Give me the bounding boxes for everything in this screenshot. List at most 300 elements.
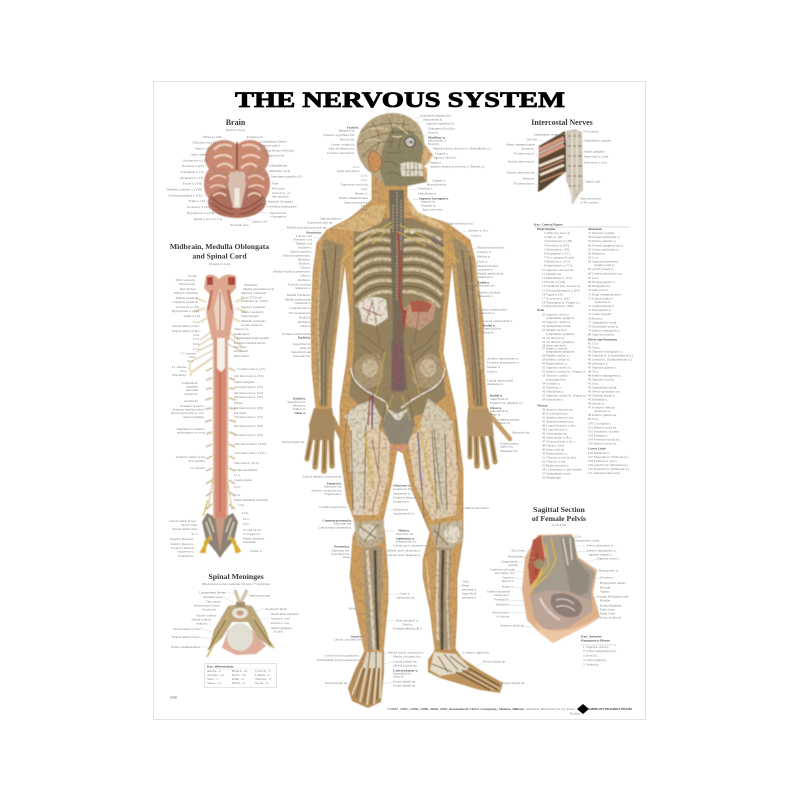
labels: pelvis right: Uterine (Fallopian) tube xyxy=(597,594,629,598)
labels: intercostal right: Intercostal n. (cut) xyxy=(584,154,608,158)
labels: thigh and knee: Anterior cutaneous brs. xyxy=(311,488,342,492)
labels: left arm: cutaneous n. xyxy=(295,301,311,305)
key column 1: sympathetic ganglion xyxy=(546,316,575,320)
labels: thigh and knee: Lateral femoral cutaneous nn. xyxy=(303,474,342,478)
labels: head and neck right: Nasal n. xyxy=(428,130,439,134)
labels: brain right: Mamillary body xyxy=(269,169,291,173)
labels: thigh and knee: Common peroneal n. xyxy=(462,506,490,510)
labels: left arm: muscular brs. xyxy=(293,354,311,358)
labels: lower leg and foot: peroneal n. xyxy=(462,588,477,592)
labels: lower leg and foot: Lateral plantar n. xyxy=(393,668,418,672)
labels: head and neck left: Supraclavicular n. xyxy=(344,200,368,204)
labels: left arm: Suprascapular n. xyxy=(290,250,312,254)
labels: pelvis right: Pubic bone xyxy=(600,608,615,612)
labels: spinal cord right: Coccygeal n. xyxy=(243,532,260,536)
labels: left arm: Ulnar n. xyxy=(300,274,311,278)
labels: right arm: Proper palmar xyxy=(500,442,520,446)
labels: pelvis left: Dorsal nerve xyxy=(492,610,510,614)
labels: spinal cord right: 10th intercostal n. (T10) xyxy=(234,442,266,446)
labels: thigh and knee: Tibial n. xyxy=(398,528,410,532)
labels: head and neck right: Lingual n. xyxy=(432,178,446,182)
labels: thigh and knee: Posterior femoral xyxy=(393,496,416,500)
labels: right arm: Lateral antebrachial n. xyxy=(483,319,513,323)
labels: left arm: Posterior brachial xyxy=(288,282,311,286)
labels: left arm: Radial n. xyxy=(299,262,311,266)
key: abbreviations: Cervical - C xyxy=(255,669,272,673)
labels: meninges right: Spinous process xyxy=(249,594,271,598)
labels: intercostal right: Spinal ganglion xyxy=(584,150,605,154)
labels: right arm: Musculocutaneous n. xyxy=(477,246,505,250)
illustration: brain xyxy=(204,140,270,218)
labels: head and neck left: C1 n. xyxy=(353,165,360,169)
labels: right arm: Common palmar xyxy=(497,418,520,422)
labels: right arm: Radial n. xyxy=(477,280,490,284)
labels: lower leg and foot: Lateral calcaneal brs. xyxy=(334,638,362,642)
labels: spinal cord right: Arachnoid xyxy=(234,349,248,353)
key: abbreviations: Key: abbreviations xyxy=(207,664,234,668)
labels: spinal cord right: 2nd intercostal n. (T2) xyxy=(234,374,263,378)
labels: meninges left: Ventral rootlets xyxy=(196,614,217,618)
labels: left arm: Brachial p. xyxy=(306,230,322,234)
key column 2: 85 Genital br. (Genitofemoral n.) xyxy=(588,358,632,362)
labels: left arm: Deep br. xyxy=(300,346,311,350)
key column 1: 22 Sympathetic trunk xyxy=(542,324,571,328)
labels: spinal cord right: Pleura xyxy=(234,401,243,405)
key: abbreviations: Arteriae - aa. xyxy=(207,673,224,677)
key column 1: 23 Middle cervical xyxy=(542,328,567,332)
heading: pelvis: of Female Pelvis xyxy=(532,514,586,523)
labels: thigh and knee: Common peroneal n. xyxy=(319,505,347,509)
labels: intercostal right: Periosteal n. (cut) xyxy=(584,160,607,164)
labels: spinal cord left: C5 n. xyxy=(193,337,200,341)
labels: brain right: Pons xyxy=(272,182,279,186)
labels: right arm: Lateral antebrachial xyxy=(487,378,513,382)
labels: spinal cord right: Ligamentum denticulatum xyxy=(234,336,269,340)
labels: meninges left: Ligamentum flavum xyxy=(199,590,226,594)
key column 1: 49 Intercostal nn. xyxy=(542,448,565,452)
labels: brain right: Choroid p. of xyxy=(272,191,291,195)
labels: lower leg and foot: Tibial n. xyxy=(402,622,413,626)
labels: right arm: Median n. xyxy=(487,365,501,369)
labels: spinal cord left: Brachial p. xyxy=(173,373,187,377)
key column 2: 106 Obturator n. xyxy=(588,451,610,455)
labels: spinal cord right: Posterior median sulcus xyxy=(234,341,266,345)
key column 2: 79 Inferior mesenteric p. xyxy=(588,328,621,332)
key column 1: 43 Lateral thoracic n. & a. xyxy=(542,424,577,428)
labels: right arm: Muscular brs. xyxy=(477,284,495,288)
labels: spinal cord right: L5 n. xyxy=(242,511,249,515)
labels: left arm: Ulnar n. xyxy=(300,324,311,328)
labels: spinal cord left: C6 n. xyxy=(193,342,200,346)
labels: spinal cord right: 1st intercostal n. (T1) xyxy=(237,367,265,371)
key column 2: 107 Muscular br. (Femoral n.) xyxy=(588,455,628,459)
key column 2: cutaneous n. xyxy=(594,409,611,413)
key column 2: 61 Lesser splanchnic n. xyxy=(588,248,619,252)
labels: right arm: Posterior brachial xyxy=(477,290,500,294)
labels: thigh and knee: Lateral sural cutaneous n. xyxy=(387,553,421,557)
labels: pelvis right: Inferior hypogastric p. xyxy=(587,548,617,552)
labels: thigh and knee: Obturator n. xyxy=(393,484,411,488)
key column 2: 95 Pudendal n. xyxy=(588,398,608,402)
labels: thigh and knee: Muscular brs. xyxy=(332,548,350,552)
labels: lower leg and foot: Sural n. xyxy=(400,592,410,596)
key column 2: 75 Celiac ganglia xyxy=(588,312,612,316)
labels: spinal cord right: Gracile tubercle xyxy=(241,323,263,327)
labels: head and neck right: Superior palpebral br. xyxy=(426,122,455,126)
key column 2: 76 Renal p. xyxy=(588,316,603,320)
mottled texture xyxy=(311,114,486,653)
labels: thigh and knee xyxy=(303,474,490,559)
key: abbreviations: Sacral - S xyxy=(255,681,268,685)
key: anterior hypogastric plexus: 1. Superior rectal p. xyxy=(583,645,609,649)
key column 2: 65 Aortic (renal) p. xyxy=(588,267,613,271)
labels: spinal cord left: Inferior colliculus xyxy=(174,291,199,295)
leader lines: brain xyxy=(203,138,270,222)
labels: spinal cord right: L2 n. xyxy=(234,485,241,489)
labels: head and neck left: Transverse cervical n. xyxy=(340,182,369,186)
labels: spinal cord right: Cauda equina xyxy=(234,478,253,482)
illustration: intercostal nerves xyxy=(538,129,583,205)
labels: head and neck left: Rami communicantes xyxy=(339,196,369,200)
labels: brain right: Infundibulum xyxy=(269,164,288,168)
key column 2: 109 Anterior br. (Obturator n.) xyxy=(588,463,628,467)
key column 1: 16 Vagus n. (X) xyxy=(542,292,563,296)
labels: right arm: cutaneous n. xyxy=(477,294,494,298)
labels: spinal cord right: Spine (C1) xyxy=(234,327,248,331)
labels: head and neck right: Ansa cervicalis xyxy=(422,208,443,212)
key column 2: 104 Posterior scrotal nn. xyxy=(588,438,620,442)
labels: head and neck right: Superior laryngeal n. xyxy=(419,196,449,200)
labels: head and neck right: Superior labial br. xyxy=(433,156,457,160)
labels: lower leg and foot: Saphenous nn. xyxy=(396,596,415,600)
labels: lower leg and foot: Medial calcaneal brs. xyxy=(393,654,421,658)
labels: left arm: Thoracodorsal n. xyxy=(289,311,311,315)
labels: spinal cord left: Accessory n. (XI) xyxy=(175,305,199,309)
labels: thigh and knee: Obturator n. xyxy=(393,508,409,512)
key column 2: 73 Genitofemoral n. xyxy=(588,304,615,308)
labels: thigh and knee: Common peroneal n. xyxy=(322,518,352,522)
labels: spinal cord left: Spinal ganglion xyxy=(183,415,204,419)
panel: central figure xyxy=(273,105,530,708)
key column 2: 103 Perineal n. xyxy=(588,434,608,438)
labels: head and neck left: C5 n. xyxy=(361,204,368,208)
labels: spinal cord left: Posterior spinal a. xyxy=(180,404,204,408)
key column 1: sympathetic ganglion xyxy=(546,332,575,336)
labels: meninges right: of C6 n. xyxy=(273,630,284,634)
labels: lower leg and foot: Tibia xyxy=(462,580,469,584)
key column 1: Thorax xyxy=(537,404,548,408)
key column 1: 6 Trigeminal n. (V) xyxy=(544,252,570,256)
key column 2: 78 Abdominal aortic p. xyxy=(588,324,619,328)
heading: key central figure: Key: Central Figure xyxy=(534,222,563,226)
key column 1: 26 Ansa subclavia xyxy=(542,344,567,348)
labels: pelvis right: Superior gluteal n. xyxy=(588,552,613,556)
key column 2: 92 Sympathetic trunk xyxy=(588,386,617,390)
labels: spinal cord right: L3 n. xyxy=(234,493,241,497)
labels: spinal cord left: Dorsal ramus (L5) n. xyxy=(169,519,197,523)
labels: meninges right: Spinal ganglion xyxy=(271,626,292,630)
right foot detail xyxy=(430,652,470,676)
key: anterior hypogastric plexus: 3. Rectal p. xyxy=(583,654,598,658)
labels: head and neck right: Ulnar n. xyxy=(471,234,482,238)
heading: brain: Brain xyxy=(226,118,246,127)
key column 2: 58 Greater splanchnic n. xyxy=(588,235,620,239)
labels: intercostal left: 7th intercostal n. xyxy=(513,182,535,186)
key: anterior hypogastric plexus: 5. Vesical p. xyxy=(583,662,599,666)
labels: intercostal right: Spinal cord xyxy=(585,180,600,184)
labels: right arm: Ulnar n. xyxy=(477,260,488,264)
labels: spinal cord left: C7 n. xyxy=(193,347,200,351)
labels: brain left: Vestibulocochlear n. (VIII) xyxy=(166,188,202,192)
labels: lower leg and foot: Superficial xyxy=(462,592,477,596)
key column 1: 10 Superior alveolar brs. xyxy=(542,268,575,272)
labels: meninges left: Subarachnoid space xyxy=(194,604,221,608)
labels: intercostal left: Ventral intercostal m. xyxy=(507,170,535,174)
labels: left arm: Medial and lateral pectoral nn. xyxy=(287,226,327,230)
labels: left arm: Posterior antebrachial xyxy=(282,332,311,336)
labels: brain left: Trigeminal n. (V) xyxy=(181,170,204,174)
labels: lower leg and foot: Dorsal digital nn. xyxy=(483,660,506,664)
labels: brain right: Frontal pole xyxy=(247,135,264,139)
labels: lower leg and foot: Proper digital nn. xyxy=(502,681,525,685)
key column 1: 46 Subscapular n. & a. xyxy=(542,436,572,440)
labels: pelvis right: S2 n. xyxy=(575,534,582,538)
labels: spinal cord left: Dorsal (posterior) n. root xyxy=(171,411,204,415)
labels: brain left: Abducens n. (VI) xyxy=(180,176,203,180)
key column 1: 11 Palatine nn. xyxy=(542,272,562,276)
labels: spinal cord left: Sacral canal xyxy=(181,523,197,527)
labels: spinal cord right: 4th intercostal n. (T4) xyxy=(234,391,263,395)
labels: pelvis right: Rectum xyxy=(600,586,611,590)
fingers xyxy=(307,414,510,471)
labels: brain right: Temporal pole xyxy=(265,154,285,158)
labels: head and neck left: Phrenic n. xyxy=(355,192,368,196)
key column 1: 45 Subscapular nn. xyxy=(542,432,567,436)
labels: left arm: Dorsal digital nn. xyxy=(282,440,305,444)
labels: right arm: Median n. xyxy=(477,254,491,258)
labels: pelvis left: Peritoneum xyxy=(508,554,523,558)
labels: spinal cord left: Dorsal ramus (C3) n. xyxy=(172,324,200,328)
panel: sagittal section of female pelvis xyxy=(487,505,629,666)
labels: right arm: Axillary n. xyxy=(477,250,491,254)
key column 2: 89 Inferior hypogastric p. xyxy=(588,374,622,378)
labels: head and neck right: Nasal br. xyxy=(428,142,440,146)
labels: head and neck left: Great auricular n. xyxy=(337,169,360,173)
key column 1: 42 Musculocutaneous n. xyxy=(542,420,574,424)
labels: head and neck right: Anterior (inferior) alveolar n. (Mental n.) xyxy=(430,164,484,168)
labels: intercostal right: T4 vertebra xyxy=(583,130,599,134)
labels: pelvis left: and ramus of n. xyxy=(494,571,515,575)
key: abbreviations: Lumbar - L xyxy=(255,673,270,677)
labels: thigh and knee: Saphenous n. xyxy=(324,492,342,496)
labels: intercostal left: Sympathetic trunk xyxy=(534,132,558,136)
key column 2: 84 Femoral br. (Genitofemoral n.) xyxy=(588,354,633,358)
labels: left arm: Median n. xyxy=(293,404,306,408)
key column 2: 57 Thoracic ganglia xyxy=(588,231,615,235)
labels: pelvis left: Sciatic n. xyxy=(502,584,514,588)
panel: spinal meninges xyxy=(170,572,299,700)
labels: spinal cord left xyxy=(169,274,206,558)
key column 2: 93 Pelvic splanchnic nn. xyxy=(588,390,620,394)
key column 1: 56 Diaphragm xyxy=(542,476,561,480)
labels: spinal cord left: T1 vertebra xyxy=(172,365,188,369)
labels: meninges left: Epidural space xyxy=(204,595,224,599)
labels: lower leg and foot: Deep peroneal n. xyxy=(396,618,419,622)
labels: intercostal right: Sympathetic ganglia xyxy=(584,138,612,142)
key column 1: 18 Pharyngeal br. (Vagus n.) xyxy=(542,300,580,304)
labels: intercostal left: Rami communicantes xyxy=(506,142,536,146)
labels: left arm: Ulnar n. xyxy=(294,411,306,415)
labels: spinal cord right: Spinal ganglion xyxy=(234,380,255,384)
labels: lower leg and foot: Medial plantar nn. xyxy=(393,664,417,668)
labels: spinal cord left: Spinal sac xyxy=(185,392,199,396)
labels: left arm: Lateral cord xyxy=(296,234,312,238)
copyright: ©1947, 1991, 1996, 1998, 2000, 2001 Anatomical Chart Company, Skokie, Illinois. xyxy=(387,706,525,711)
labels: left arm: Axillary n. xyxy=(298,246,312,250)
labels: left arm: Radial n. xyxy=(299,316,311,320)
labels: lower leg and foot: Common digital nn. xyxy=(463,650,490,654)
copyright: Bachin xyxy=(570,712,580,716)
labels: pelvis right: Vagina xyxy=(600,590,610,594)
subheading: pelvis: (Left half) xyxy=(552,523,566,527)
key column 1: 15 Glossopharyngeal n. (IX) xyxy=(542,288,580,292)
feet skin xyxy=(348,650,384,708)
labels: right arm: Superficial br. xyxy=(483,326,502,330)
labels: brain left: Glossopharyngeal n. (IX) xyxy=(168,194,202,198)
key: abbreviations: Venae - vv. xyxy=(207,681,222,685)
labels: head and neck right: Mental Inferior alveolar br. (Mandibular n.) xyxy=(433,146,491,150)
labels: right arm: Ulnar n. xyxy=(487,370,498,374)
labels: right arm: Posterior br. (Median n.) xyxy=(490,401,523,405)
labels: intercostal right: Spinous process xyxy=(580,196,602,200)
labels: spinal cord left: Pineal body xyxy=(179,282,195,286)
copyright: Medical Illustrations by Peter xyxy=(526,707,576,711)
labels: spinal cord right: Vagal trigone xyxy=(241,314,259,318)
labels: intercostal right xyxy=(580,130,612,204)
key column 2: Abdomen xyxy=(588,227,602,231)
labels: spinal cord left: Openings for anterior xyxy=(177,427,206,431)
labels: brain right: Lateral fissure (Sylvian) xyxy=(262,148,294,152)
labels: spinal cord left: Fornix xyxy=(188,274,197,278)
labels: spinal cord right: L4 n. xyxy=(238,503,245,507)
key column 1: 51 Thoracic aortic br. & p. xyxy=(542,456,577,460)
heading: midbrain: Midbrain, Medulla Oblongata xyxy=(170,242,269,251)
labels: spinal cord right: 8th intercostal n. (T8) xyxy=(234,424,263,428)
key column 1: 30 Right phrenic n. xyxy=(542,362,568,366)
labels: lower leg and foot: Superficial br. xyxy=(393,672,412,676)
key: anterior hypogastric plexus: 4. Uterovaginal p. xyxy=(583,658,607,662)
labels: pelvis left xyxy=(487,548,526,628)
labels: spinal cord right: Denticulate xyxy=(234,332,250,336)
labels: head and neck right: Supraorbital n. xyxy=(423,118,443,122)
heading: midbrain xyxy=(170,242,269,260)
illustration: spinal cord xyxy=(190,275,246,558)
key column 2: 108 Posterior n. and a. xyxy=(588,459,618,463)
labels: spinal cord left: T12 vertebra xyxy=(188,459,206,463)
key column 1: 38 Subclavian a. xyxy=(542,398,564,402)
key column 2: 81 L3 n. xyxy=(588,342,599,346)
labels: intercostal left: 7th intercostal n. xyxy=(513,152,535,156)
labels: pelvis right: Hypogastric n. xyxy=(599,568,619,572)
key column 1: 47 Thoracodorsal n. & a. xyxy=(542,440,575,444)
labels: head and neck right: Zygomaticotemporal br. xyxy=(420,114,452,118)
key column 1: esophageal brs. xyxy=(546,378,566,382)
labels: right arm xyxy=(477,246,530,453)
labels: lower leg and foot: Proper digital nn. xyxy=(393,684,416,688)
labels: left arm: Posterior cord xyxy=(293,238,312,242)
labels: head and neck right: Zygomatic (facial) n. xyxy=(428,126,456,130)
heading: pelvis xyxy=(532,505,586,523)
key column 1: Neck xyxy=(537,308,544,312)
labels: right arm: Superficial br. xyxy=(490,397,509,401)
lower legs xyxy=(363,546,382,650)
labels: head and neck left: C4 n. xyxy=(361,187,368,191)
arm interiors xyxy=(317,238,344,407)
key column 2: 60 Phrenic ganglion and p. xyxy=(588,244,624,248)
key column 1: 4 Trochlear n. (IV) xyxy=(544,244,569,248)
labels: brain left: Trochlear n. (IV) xyxy=(182,164,204,168)
labels: head and neck right: Vertebral a. xyxy=(418,186,433,190)
labels: brain left: Hypoglossal n. (XII) xyxy=(187,211,214,215)
key column 1: 25 1st thoracic ganglion xyxy=(542,340,574,344)
key column 2: 91 S3 n. xyxy=(588,382,599,386)
labels: spinal cord left: Middle peduncle xyxy=(176,296,199,300)
labels: pelvis right: Sympathetic trunk xyxy=(575,538,600,542)
labels: spinal cord right: Pia mater xyxy=(234,345,247,349)
labels: lower leg and foot: Intermediate dorsal cutaneous n. xyxy=(317,658,360,662)
labels: spinal cord right: 3rd intercostal n. (T3) xyxy=(234,385,263,389)
labels: spinal cord left: L1 vertebra xyxy=(190,466,206,470)
labels: head and neck right: Axillary n. & a. xyxy=(468,228,489,232)
labels: spinal cord right: Filum terminale xyxy=(243,536,265,540)
labels: meninges right: Denticulate ligament xyxy=(271,612,299,616)
labels: head and neck left: C3 n. xyxy=(361,178,368,182)
labels: thigh and knee: Saphenous & br. xyxy=(393,512,415,516)
labels: right arm: Radial n. xyxy=(490,394,503,398)
title: THE NERVOUS SYSTEM xyxy=(235,87,565,112)
labels: thigh and knee: Femoral n. xyxy=(327,482,342,486)
key column 2: ganglion and p. xyxy=(594,263,615,267)
key column 1: 34 Axillary n. xyxy=(542,382,560,386)
labels: brain left: Spinal n. (root of C1) xyxy=(194,217,222,221)
labels: brain right: Occipital pole xyxy=(230,223,249,227)
labels: left arm: Superficial br. xyxy=(292,342,311,346)
labels: left arm: Medial brachial cutaneous n. xyxy=(273,270,311,274)
labels: spinal cord left: C4 n. xyxy=(193,333,200,337)
labels: spinal cord right: S1 n. xyxy=(243,517,250,521)
key column 1: 48 Ulnar n. (cut) xyxy=(542,444,564,448)
illustration: meninges section xyxy=(207,590,274,657)
labels: lower leg and foot: Posterior tibial n. & a. xyxy=(393,626,422,630)
labels: spinal cord left: Dorsal ramus (S) n. xyxy=(172,527,198,531)
leader lines: intercostal xyxy=(536,132,584,186)
palms xyxy=(309,408,335,440)
labels: brain right: 4th ventricle xyxy=(272,194,289,198)
labels: head and neck right: Lingual n. xyxy=(435,152,449,156)
labels: right arm: digital nn. xyxy=(500,444,514,448)
labels: spinal cord right: S3 and S4 nn. xyxy=(243,528,261,532)
labels: spinal cord left: Vagus n. (X) xyxy=(183,314,200,318)
key: anterior hypogastric plexus: Key: Anterior xyxy=(581,634,602,638)
labels: spinal cord left: Cingulate peduncle xyxy=(172,300,199,304)
pale inner surfaces xyxy=(350,415,390,515)
labels: spinal cord left: Arachnoid xyxy=(184,399,198,403)
key column 1: 37 Superior cardiac br. (Vagus n.) xyxy=(542,394,586,398)
labels: meninges left: Arachnoid xyxy=(202,608,216,612)
central pelvis xyxy=(382,410,415,444)
labels: thigh and knee: Saphenous n. xyxy=(393,492,411,496)
labels: right arm: cutaneous n. xyxy=(478,311,495,315)
